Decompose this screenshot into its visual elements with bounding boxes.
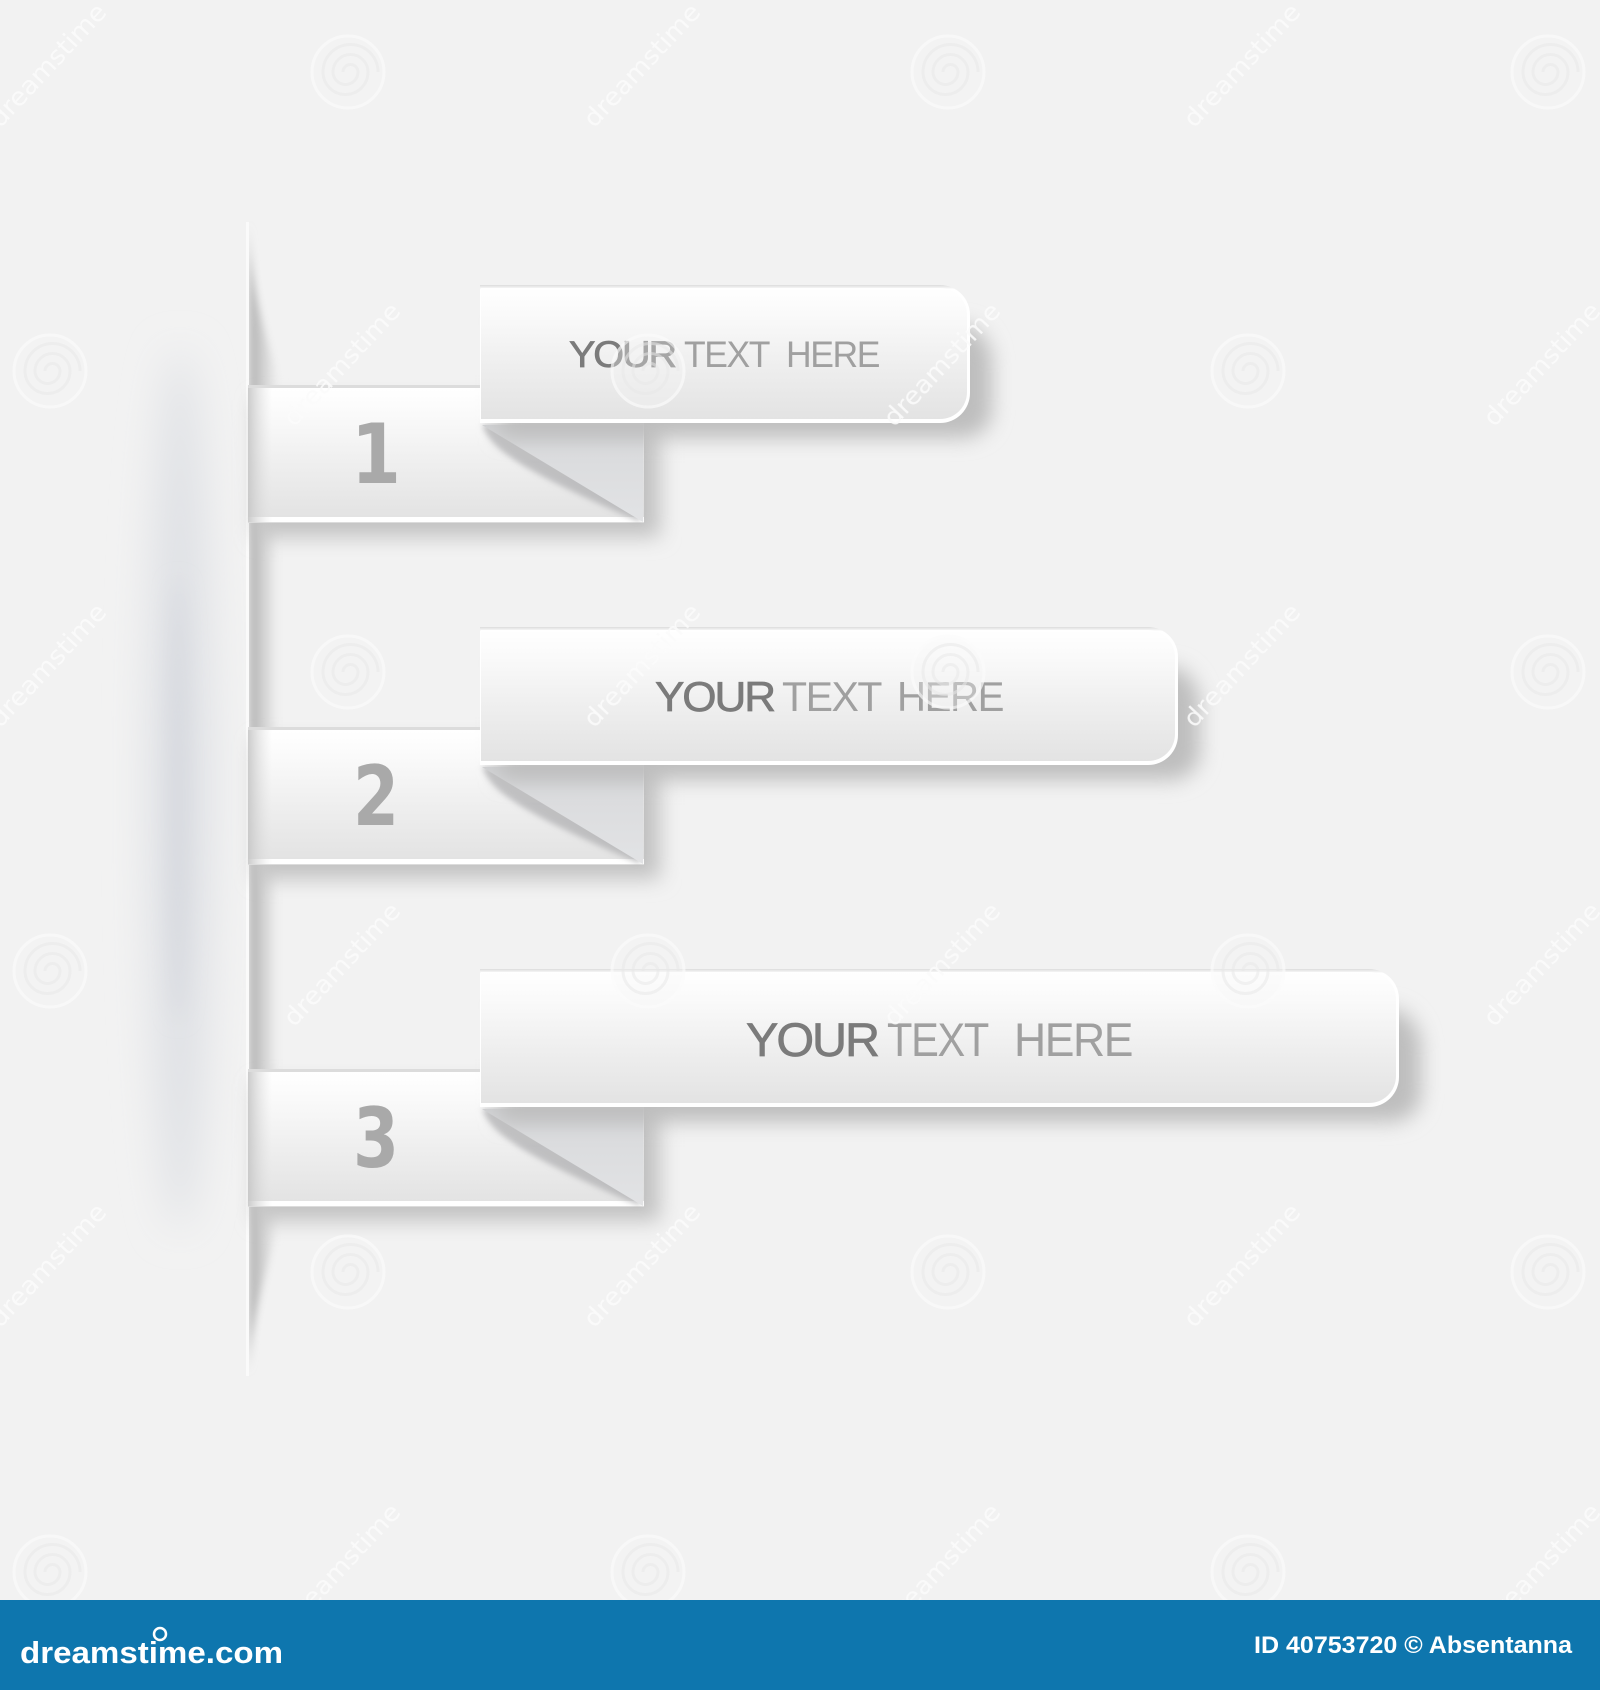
watermark text: dreamstime (577, 0, 706, 133)
label text 3: YOUR (746, 1013, 878, 1066)
watermark text: dreamstime (1477, 297, 1600, 432)
label text 1: YOUR (569, 334, 675, 375)
row 3 (248, 969, 1421, 1221)
tab shadow 2 (256, 742, 660, 879)
number tab 1 (248, 385, 644, 523)
watermark text: dreamstime (277, 297, 406, 432)
fold shadow 1 (482, 425, 643, 522)
number tab 3 (248, 1069, 644, 1207)
footer logo: dreamstime.com (20, 1635, 283, 1670)
number tab 2 (248, 727, 644, 865)
bar shadow 3 (500, 1009, 1421, 1122)
tab shadow 1 (256, 400, 660, 537)
label bar 3 (480, 969, 1399, 1107)
fold 2 (482, 767, 643, 864)
fold shadow 3 (482, 1109, 643, 1206)
number 3: 3 (353, 1090, 399, 1187)
label text 3 (746, 1013, 1132, 1066)
footer credit: ID 40753720 © Absentanna (1254, 1632, 1573, 1659)
fold 1 (482, 425, 643, 522)
watermark text: dreamstime (577, 1198, 706, 1333)
label bar 1 (480, 285, 970, 423)
fold shadow 2 (482, 767, 643, 864)
label text 2 (655, 673, 1003, 720)
watermark text: dreamstime (1177, 598, 1306, 733)
number 2: 2 (353, 748, 399, 845)
label bar 2 (480, 627, 1178, 765)
watermark text: dreamstime (1177, 1198, 1306, 1333)
label text 2: TEXT (782, 673, 882, 720)
bar shadow 1 (500, 325, 992, 438)
watermark text: dreamstime (1477, 1498, 1600, 1633)
watermark text: dreamstime (877, 1498, 1006, 1633)
vertical divider with tapered shadow (249, 250, 274, 1352)
label text 1 (569, 334, 880, 375)
bar shadow 2 (500, 667, 1200, 780)
footer bar (0, 1600, 1600, 1690)
watermark text: dreamstime (1177, 0, 1306, 133)
fold 3 (482, 1109, 643, 1206)
label text 1: HERE (786, 334, 880, 375)
watermark text: dreamstime (1477, 897, 1600, 1032)
row 1 (248, 285, 992, 537)
label text 3: TEXT (887, 1013, 989, 1066)
row 2 (248, 627, 1200, 879)
tab shadow 3 (256, 1084, 660, 1221)
soft shadow left of the divider (148, 350, 212, 1230)
watermark text: dreamstime (877, 897, 1006, 1032)
label text 3: HERE (1014, 1013, 1132, 1066)
label text 2: HERE (897, 673, 1003, 720)
label text 1: TEXT (684, 334, 770, 375)
label text 2: YOUR (655, 673, 775, 720)
watermark text: dreamstime (277, 897, 406, 1032)
watermark text: dreamstime (877, 297, 1006, 432)
number 1: 1 (351, 406, 401, 503)
watermark text: dreamstime (277, 1498, 406, 1633)
watermark text: dreamstime (577, 598, 706, 733)
